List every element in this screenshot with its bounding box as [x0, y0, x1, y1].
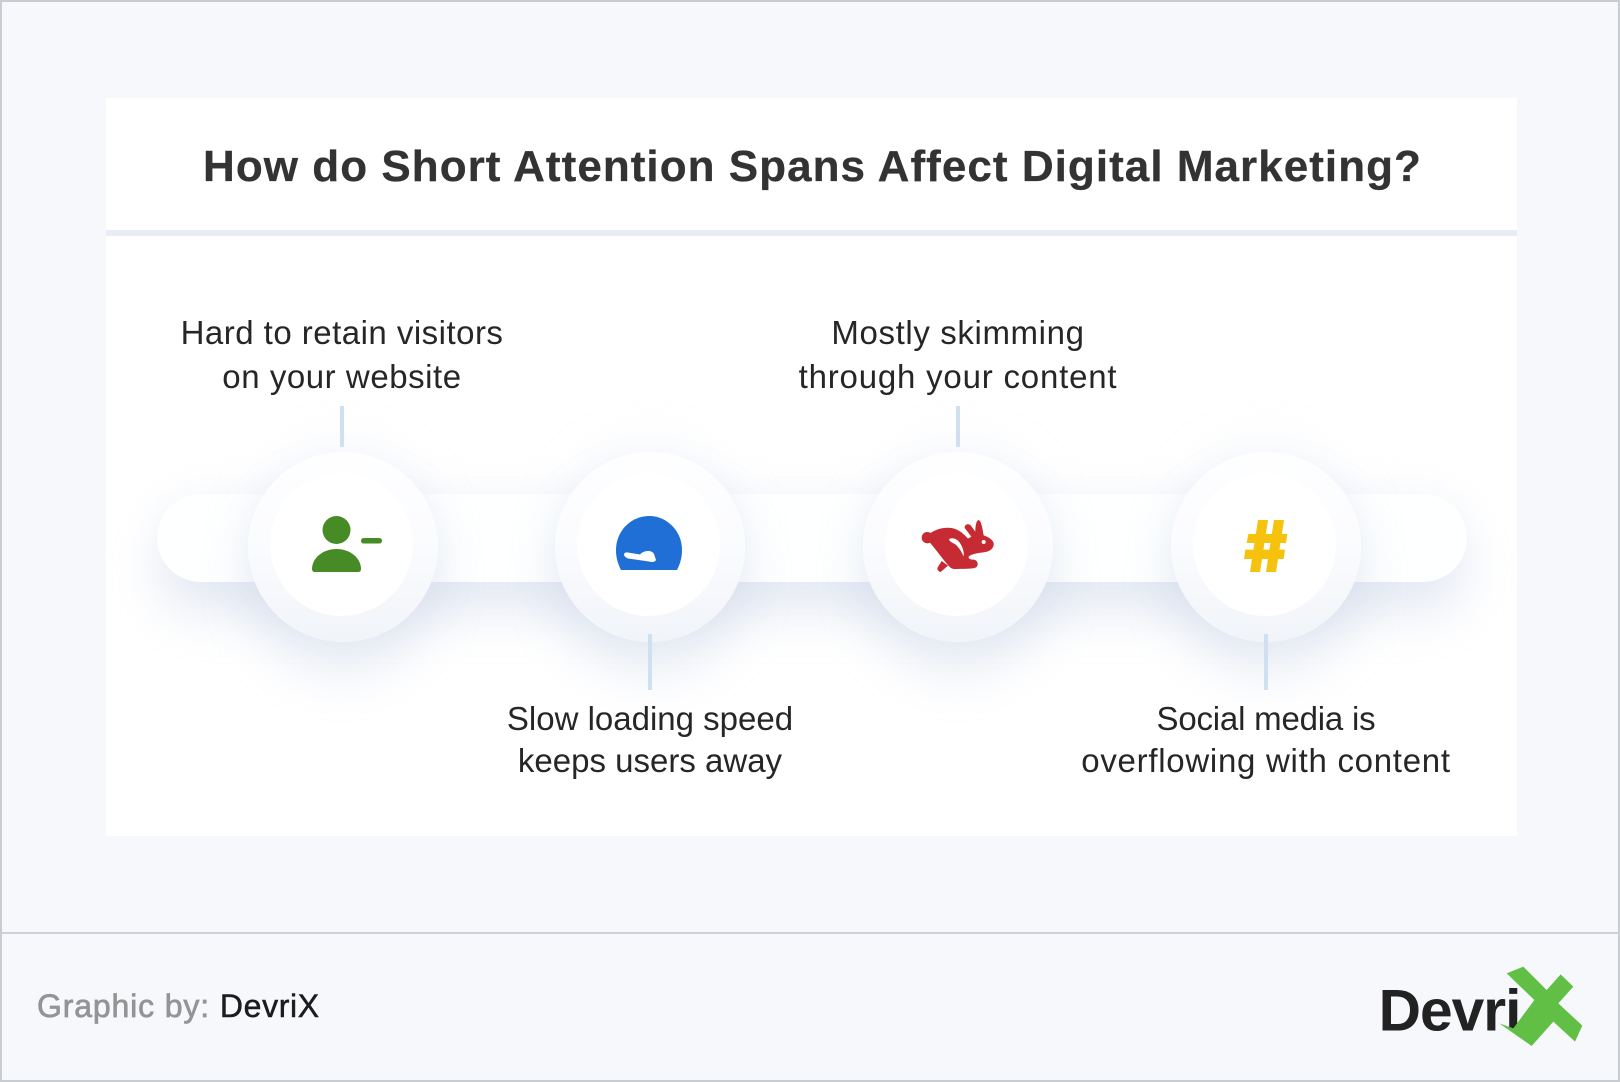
step 4 circle — [1171, 452, 1361, 642]
label: step 3 — [799, 314, 1117, 395]
title: How do Short Attention Spans Affect Digital Marketing? — [203, 142, 1422, 191]
label: step 1: on your website — [222, 358, 462, 395]
label: step 4 — [1081, 700, 1451, 779]
label: step 4: Social media is — [1157, 700, 1375, 737]
label: step 3: through your content — [799, 358, 1117, 395]
icon: running rabbit — [922, 520, 994, 572]
step 1 circle — [248, 452, 438, 642]
label: step 2 — [507, 700, 793, 779]
footer credit: Graphic by: DevriX — [37, 988, 320, 1024]
label: step 1: Hard to retain visitors — [181, 314, 503, 351]
label: step 2: Slow loading speed — [507, 700, 793, 737]
label: step 1 — [181, 314, 503, 395]
icon: speedometer — [616, 516, 682, 570]
step 2 circle — [555, 452, 745, 642]
icon: hashtag — [1244, 520, 1288, 572]
connector: step 3 — [956, 406, 960, 447]
logo: DevriX — [1379, 966, 1582, 1046]
label: step 3: Mostly skimming — [831, 314, 1085, 351]
panel: main card — [106, 98, 1517, 836]
label: step 4: overflowing with content — [1081, 742, 1451, 779]
footer divider — [2, 932, 1618, 934]
connector: step 2 — [648, 634, 652, 690]
label: step 2: keeps users away — [518, 742, 782, 779]
connector: step 1 — [340, 406, 344, 447]
timeline bar — [157, 494, 1467, 582]
connector: step 4 — [1264, 634, 1268, 690]
logo: DevriX: Devri — [1379, 979, 1520, 1044]
step 3 circle — [863, 452, 1053, 642]
icon: user minus — [312, 516, 382, 572]
title divider — [106, 230, 1517, 236]
